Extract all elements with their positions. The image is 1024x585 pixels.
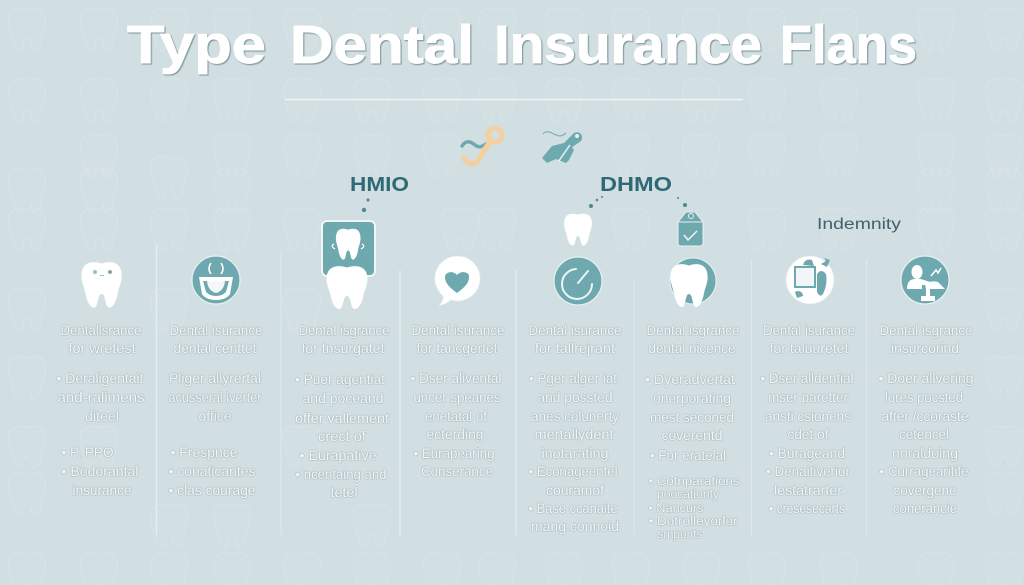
text: column 4: • Eurapearing [414, 446, 494, 461]
text: column 7: • Burageand [769, 446, 845, 461]
text: column 6: onerporating [653, 391, 731, 406]
icon: orange key [462, 128, 502, 164]
icon: speech bubble heart [435, 256, 480, 306]
text: column 1: for wretest [68, 341, 136, 356]
text: column 8: covergene [894, 483, 956, 498]
text: column 8: lores pocsted [885, 390, 963, 405]
text: column 2: dental centtet [174, 341, 257, 356]
text: column 4: ecterding [426, 427, 484, 442]
text: column 1: insurance [72, 483, 132, 498]
text: column 1: Dentallsrance [60, 323, 142, 338]
text: column 5: mang.connoid [531, 519, 619, 534]
icon: x-ray card with tooth [322, 221, 375, 309]
text: column 3 [295, 323, 390, 500]
title: Flans [780, 15, 917, 75]
text: column 5: Dental isurance [528, 323, 622, 338]
text: column 4: for tancgertet [416, 341, 498, 356]
text: column 6: • Dyeradvertat [645, 372, 735, 387]
icon: teal bowl [192, 256, 240, 304]
text: column 7: Dental isurance [763, 323, 855, 338]
icon: white circle with monitor [786, 256, 834, 304]
text: column 8: conerancie [893, 501, 957, 516]
text: column 3: for tnsurgatet [302, 341, 385, 356]
panel: column 6 [645, 258, 740, 541]
text: column 4: • Dser alivental [410, 371, 502, 386]
text: column 5: anes colunerty [531, 409, 619, 424]
text: column 7: mser paretter [768, 390, 848, 405]
text: column 3: • Eurapative [300, 448, 376, 463]
text: column 1: • P. PPO [62, 445, 114, 460]
text: column 6 [645, 323, 740, 541]
text: column 7: cdet of [788, 427, 829, 442]
icon: tooth on teal circle [670, 258, 716, 307]
label: DHMO: DHMO [600, 174, 672, 196]
text: column 2: • Frespnce [170, 445, 238, 460]
text: column 1: diteel [85, 409, 119, 424]
icon: teal gauge [554, 257, 602, 305]
title: Dental [290, 15, 474, 75]
text: column 2: Dental isurance [170, 323, 262, 338]
text: column 3: • ncentaing and [296, 467, 386, 482]
text: column 4: enetatal of [425, 409, 487, 424]
text: column 5: • Pger alger iat [529, 371, 617, 386]
text: column 6: poocationty [657, 489, 719, 501]
panel: column 3 [295, 221, 390, 500]
icon: lock badge [678, 212, 703, 246]
text: column 8: after /ccoraste [882, 409, 968, 424]
text: column 7: lestatrarter [774, 483, 843, 498]
text: column 6: Dental isgrance [646, 323, 740, 338]
text: column 5: and possted [538, 390, 612, 405]
text: column 4: Conserance [421, 464, 493, 479]
text: column 3: Dental isgrance [298, 323, 390, 338]
icon: white tooth under DHMO [564, 214, 592, 246]
text: column 6: mest seconed [650, 410, 734, 425]
text: column 7: ansti csionens [765, 409, 851, 424]
text: column 1: • Deraligentait [56, 371, 144, 386]
text: column 2: Pliger allyrertal [169, 371, 261, 386]
connector dots [362, 196, 687, 212]
text: column 2: • conaticantes [168, 464, 256, 479]
text: column 4 [410, 323, 504, 479]
text: column 5 [528, 323, 622, 534]
text: column 1: and-ralimens [58, 390, 145, 405]
icon: teal tool [542, 132, 582, 163]
text: column 4: Dental isurance [412, 323, 504, 338]
text: column 7: • cresesecarts [769, 501, 845, 516]
panel: column 4 [410, 256, 504, 479]
text: column 2: • clas courage [168, 483, 256, 498]
text: column 8: insurcorind [891, 341, 959, 356]
text: column 8 [878, 323, 974, 516]
text: column 7: • Denaitiverior [766, 464, 850, 479]
icon: people at dental chair [901, 256, 949, 304]
text: column 6: dental nicence [648, 341, 736, 356]
text: column 1 [56, 323, 145, 498]
text: column 6: coverentd [662, 428, 722, 443]
panel: column 2 [168, 256, 262, 498]
panel: column 1 [56, 262, 145, 498]
panel: column 5 [528, 257, 622, 534]
text: column 7: for taluuretet [770, 341, 849, 356]
text: column 2 [168, 323, 262, 498]
text: column 1: • Bodorantal [62, 464, 138, 479]
label: Indemnity: Indemnity [817, 216, 901, 233]
text: column 8: noraldoing [892, 446, 958, 461]
text: column 6: • For eratelal [650, 448, 726, 463]
title: Insurance [494, 15, 762, 75]
text: column 3: tetel [330, 485, 358, 500]
text: column 8: Dental isgrance [880, 323, 972, 338]
text: column 7 [760, 323, 855, 516]
text: column 3: offer vallement [295, 411, 389, 426]
text: column 4: uncer speanes [414, 390, 501, 405]
text: column 5: mertallydent [534, 427, 614, 442]
text: column 5: couramof [546, 483, 604, 498]
panel: column 8 [878, 256, 974, 516]
label: HMO: HMIO [350, 174, 409, 196]
title: Type [127, 15, 266, 75]
text: column 6: smponts [658, 529, 703, 541]
text: column 6: • Dotrolleyorlor [648, 516, 738, 528]
text: column 3: and poceand [302, 391, 384, 406]
text: column 6: • Nancurs [648, 503, 704, 515]
title [127, 15, 917, 75]
text: column 5: • Econageentel [528, 464, 618, 479]
text: column 8: • Curragearitife [880, 464, 968, 479]
text: column 5: for tallrejrant [535, 341, 615, 356]
text: column 6: • Cotnparations [648, 476, 740, 488]
text: column 3: crect of [318, 429, 366, 444]
text: column 5: • Base ccanaite [528, 501, 618, 516]
panel: column 7 [760, 256, 855, 516]
text: column 2: office [198, 409, 232, 424]
icon: smiling tooth [81, 262, 122, 308]
text: column 5: inotarating [542, 446, 608, 461]
text: column 3: • Puer agentiat [295, 372, 385, 387]
text: column 8: cetencel [899, 427, 949, 442]
text: column 7: • Dser alldential [760, 371, 854, 386]
text: column 2: acusseral iverter [168, 390, 262, 405]
text: column 8: • Doer allvering [878, 371, 974, 386]
